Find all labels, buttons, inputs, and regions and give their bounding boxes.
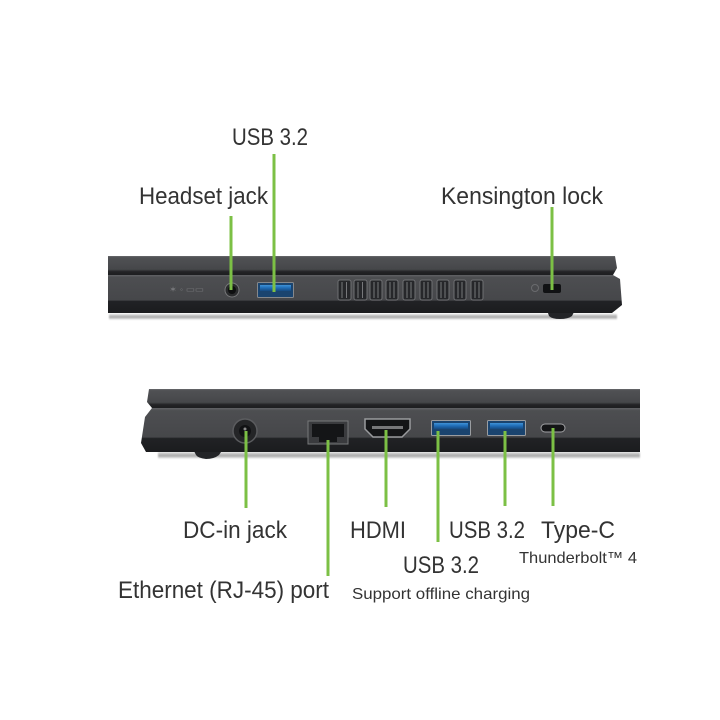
USB 3.2 port [258,282,294,298]
Type-C port [541,424,565,432]
rubber foot [547,310,575,319]
HDMI port [365,419,410,437]
label: USB 3.2: USB 3.2 [449,517,525,544]
label: Thunderbolt 4: Thunderbolt™ 4 [519,550,637,567]
USB 3.2 port [488,420,526,436]
label: Type-C: Type-C [541,517,615,544]
ventilation grille [338,280,483,300]
USB 3.2 port, offline charging [432,420,470,436]
laptop: left side view [108,256,622,320]
label: Ethernet (RJ-45) port: Ethernet (RJ-45) port [118,577,329,604]
label: HDMI: HDMI [350,517,406,544]
label: DC-in jack: DC-in jack [183,517,288,544]
headset jack port [225,283,239,297]
label: Headset jack: Headset jack [139,183,269,210]
label: USB 3.2: USB 3.2 [232,124,308,151]
leader lines [231,154,553,576]
laptop: right side view [141,389,640,459]
label: Support offline charging: Support offline charging [352,586,530,603]
status indicators: ✶ ◦ ▭▭ [169,285,204,294]
DC-in jack port [233,419,257,443]
Kensington lock slot [532,284,561,293]
Ethernet RJ-45 port [308,421,348,444]
rubber foot [193,449,223,459]
label: USB 3.2: USB 3.2 [403,552,479,579]
label: Kensington lock: Kensington lock [441,183,604,210]
